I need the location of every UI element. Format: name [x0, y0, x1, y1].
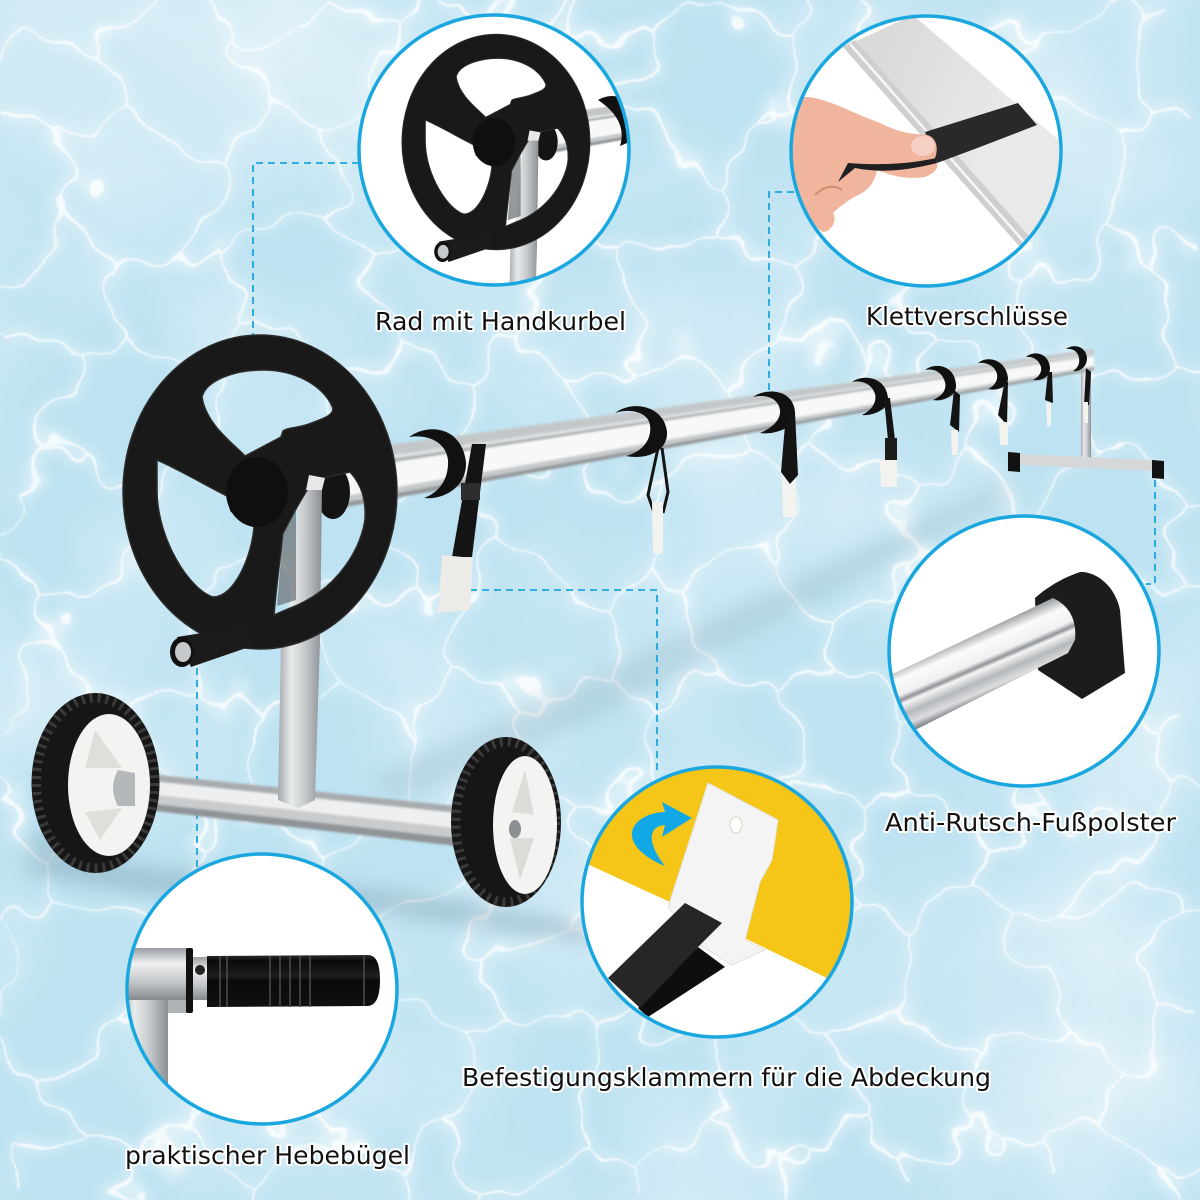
strap	[638, 947, 725, 1017]
callout ring: cover clamp	[582, 767, 852, 1037]
clip	[668, 783, 778, 965]
strap 4 with clip	[852, 378, 897, 487]
strap 3 with clip	[753, 391, 798, 517]
callout: anti-slip foot	[880, 516, 1161, 786]
callout: velcro strap	[788, 15, 1062, 285]
roller shadows on water	[30, 484, 1020, 945]
grip	[207, 955, 380, 1007]
strap 8 with clip	[1066, 346, 1091, 423]
left wheel	[32, 693, 160, 873]
callout wheel detail	[401, 34, 622, 282]
strap 2 with clip	[615, 406, 668, 553]
label: cover clamp: Befestigungsklammern für die Abdeckung	[462, 1063, 991, 1092]
right end stand	[1008, 362, 1164, 479]
blue arrow	[632, 802, 692, 866]
label: hand wheel: Rad mit Handkurbel	[375, 307, 626, 336]
axle crossbar	[111, 770, 456, 846]
dashed connector lines	[197, 163, 1155, 868]
main tube, frame upright and hand wheel	[123, 335, 1094, 808]
product: pool cover roller	[32, 335, 1164, 907]
tube	[892, 598, 1076, 730]
callout ring: anti-slip foot	[889, 516, 1159, 786]
strap 7 with clip	[1026, 353, 1053, 426]
callout tube	[843, 15, 1062, 247]
callout ring: lifting handle	[127, 854, 397, 1124]
callout ring: velcro strap	[791, 16, 1061, 286]
label: lifting handle: praktischer Hebebügel	[125, 1141, 410, 1170]
right wheel	[451, 737, 561, 907]
callout: hand wheel	[360, 16, 628, 284]
callout: lifting handle	[120, 853, 398, 1125]
strap 6 with clip	[978, 359, 1008, 445]
callout ring: hand wheel	[359, 15, 629, 285]
strap 1 with clip	[409, 429, 486, 613]
foot pad	[1035, 572, 1125, 699]
callout hand	[788, 97, 938, 232]
callout: cover clamp	[582, 767, 854, 1039]
label: velcro strap: Klettverschlüsse	[866, 302, 1068, 331]
label: anti-slip foot: Anti-Rutsch-Fußpolster	[885, 808, 1177, 837]
strap 5 with clip	[925, 366, 960, 455]
callout strap	[925, 103, 1037, 163]
axle end collar	[113, 770, 135, 806]
